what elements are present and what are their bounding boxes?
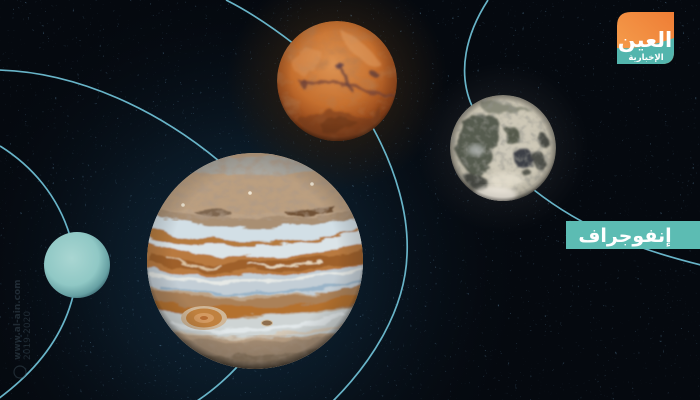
watermark: www.al-ain.com bbox=[13, 279, 23, 360]
upper mottled zone bbox=[160, 153, 350, 210]
lower orange belt bbox=[150, 284, 360, 309]
watermark bbox=[13, 279, 33, 378]
pale zone bbox=[140, 262, 370, 296]
logo: Al-Ain News: الإخبارية bbox=[628, 53, 664, 63]
south polar zone bbox=[180, 336, 332, 356]
lower white band bbox=[158, 306, 353, 340]
planet: Uranus bbox=[44, 232, 110, 298]
watermark: 2019-2020 bbox=[23, 311, 33, 360]
planet: Jupiter bbox=[147, 153, 363, 369]
label: infographic tag bbox=[566, 221, 700, 249]
white band 1 bbox=[152, 214, 358, 244]
logo: Al-Ain News: العين bbox=[618, 28, 672, 52]
planet: Mars bbox=[277, 21, 397, 145]
great red spot bbox=[181, 306, 227, 330]
label: infographic tag: إنفوجراف bbox=[578, 225, 672, 247]
orange belt bbox=[140, 242, 370, 277]
white band 2 bbox=[148, 229, 362, 260]
planet: Moon bbox=[450, 95, 556, 204]
thin orange band bbox=[150, 227, 358, 248]
logo: Al-Ain News bbox=[617, 12, 674, 64]
